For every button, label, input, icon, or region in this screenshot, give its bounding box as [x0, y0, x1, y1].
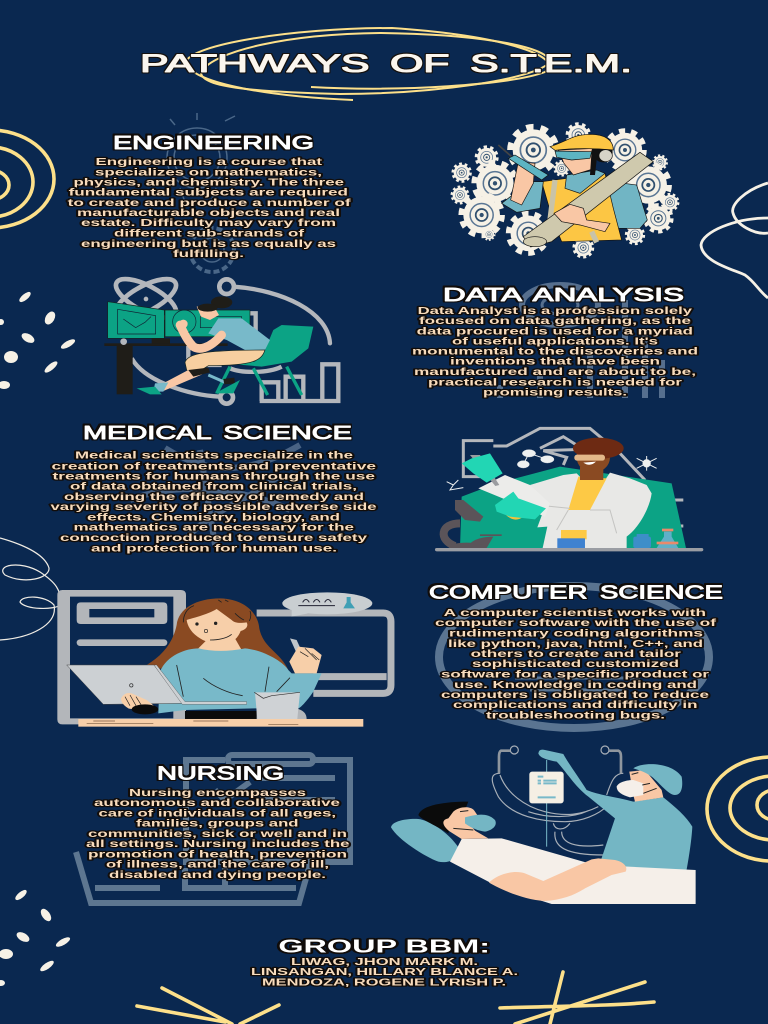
body: computer science: computer software with the use of	[435, 618, 717, 629]
engineer figure	[498, 134, 653, 247]
panel: medical science text	[50, 423, 378, 554]
body: data analysis: data procured is used for a myriad	[417, 326, 693, 338]
body: medical science: observing the efficacy of remedy and	[64, 492, 364, 503]
body: engineering: fulfilling.	[173, 249, 245, 260]
body: data analysis: promising results.	[483, 388, 628, 398]
decoration: white paint dabs lower	[0, 888, 71, 986]
body: engineering: engineering but is as equally as	[81, 239, 336, 250]
panel: computer science text	[429, 582, 723, 722]
illustration: woman with tablet	[57, 590, 391, 727]
panel: engineering text	[68, 133, 352, 260]
group members: LINSANGAN, HILLARY BLANCE A.	[251, 967, 519, 978]
scientist figure	[462, 438, 652, 548]
body: computer science: like python, java, html, C++, and	[448, 639, 703, 650]
illustration: scientist with pipette	[435, 428, 703, 551]
illustration: data analyst at desk	[104, 272, 338, 404]
group members	[251, 957, 519, 988]
body: engineering: specializes on mathematics,	[95, 168, 323, 178]
body: medical science: treatments for humans through the use	[52, 472, 376, 482]
heading: engineering: ENGINEERING	[113, 133, 314, 153]
decoration: right white scribble	[701, 183, 768, 298]
body: computer science: complications and difficulty in	[453, 700, 698, 711]
body: engineering: Engineering is a course that	[96, 157, 323, 168]
body: nursing: care of individuals of all ages,	[98, 808, 337, 820]
watermark: medical DNA	[130, 445, 300, 545]
decoration: lower-right yellow spirals	[707, 757, 768, 861]
illustration: nurse and patient	[391, 746, 696, 904]
grey document panel	[57, 590, 186, 724]
illustration: engineer with gears	[452, 124, 678, 257]
body: engineering: manufacturable objects and real	[77, 208, 340, 219]
body: computer science: others to create and tailor	[471, 649, 681, 660]
body: medical science: effects. Chemistry, biology, and	[87, 512, 340, 524]
body: computer science: computers is obligated to reduce	[441, 690, 710, 701]
body: data analysis: focused on data gathering, as the	[419, 316, 692, 327]
body: nursing: disabled and dying people.	[109, 870, 327, 881]
body: medical science: mathematics are necessary for the	[74, 522, 355, 534]
body: computer science: A computer scientist works with	[444, 608, 706, 619]
heading: group name: GROUP BBM:	[278, 936, 490, 956]
body: engineering: estate. Difficulty may vary from	[81, 218, 337, 229]
body: engineering: fundamental subjects are required	[69, 188, 348, 198]
body: nursing: of illness, and the care of ill,	[106, 860, 330, 870]
decoration: white paint dabs upper	[0, 290, 76, 389]
body: nursing: promotion of health, prevention	[88, 850, 347, 860]
body: computer science	[435, 608, 717, 722]
title text: PATHWAYS OF S.T.E.M.	[140, 50, 632, 78]
nurse figure	[538, 750, 692, 870]
decoration: bottom yellow star left	[137, 988, 279, 1024]
panel: nursing text	[86, 764, 351, 881]
body: engineering: physics, and chemistry. The three	[74, 178, 345, 188]
speech bubble	[282, 592, 372, 617]
chair	[217, 325, 313, 395]
watermark: engineering light bulb and gear	[167, 113, 235, 272]
watermark: computer science ring	[439, 586, 709, 728]
gears cluster	[452, 124, 678, 257]
green backdrop	[460, 467, 686, 548]
body: data analysis: manufactured and are about to be,	[414, 367, 697, 378]
heading: medical science: MEDICAL SCIENCE	[83, 423, 352, 443]
body: nursing: Nursing encompasses	[129, 788, 306, 799]
body: data analysis: Data Analyst is a profession solely	[418, 306, 693, 317]
body: computer science: rudimentary coding algorithms	[449, 628, 703, 640]
desk	[78, 719, 363, 727]
title with scribble ring	[140, 28, 632, 100]
decoration: left thin white scribble	[0, 538, 60, 640]
body: nursing: all settings. Nursing includes the	[86, 839, 351, 850]
microscope	[444, 500, 502, 551]
heading: data analysis: DATA ANALYSIS	[443, 285, 684, 305]
woman figure	[67, 598, 322, 719]
circuit lines	[463, 428, 683, 526]
body: medical science: concoction produced to ensure safety	[60, 533, 368, 544]
panel: data analysis text	[412, 285, 698, 398]
body: computer science: use. Knowledge in coding and	[454, 680, 697, 691]
body: nursing: communities, sick or well and in	[88, 829, 347, 840]
lab bottles	[633, 529, 678, 548]
body: nursing: autonomous and collaborative	[94, 798, 341, 809]
body: computer science: software for a specific product or	[441, 670, 709, 680]
body: medical science: of data obtained from clinical trials,	[70, 482, 358, 492]
group members: LIWAG, JHON MARK M.	[291, 957, 479, 968]
panel: group credits	[251, 936, 519, 988]
patient in bed	[391, 802, 696, 904]
body: data analysis	[412, 306, 698, 398]
stethoscope tubing	[492, 746, 623, 855]
body: medical science: Medical scientists specialize in the	[75, 450, 354, 462]
body: data analysis: of useful applications. It's	[452, 336, 658, 348]
IV drip	[529, 760, 564, 847]
heading: nursing: NURSING	[157, 764, 284, 784]
body: data analysis: monumental to the discoveries and	[412, 346, 698, 358]
body: medical science	[50, 450, 378, 554]
body: computer science: troubleshooting bugs.	[486, 710, 666, 722]
watermark: nursing clipboard	[76, 755, 350, 903]
body: engineering: to create and produce a number of	[68, 198, 352, 209]
body: medical science: and protection for human use.	[91, 544, 338, 554]
body: nursing: families, groups and	[136, 818, 299, 830]
atom icon	[111, 272, 181, 325]
lab bench line	[435, 548, 703, 551]
body: engineering: different sub-strands of	[114, 228, 305, 240]
group members: MENDOZA, ROGENE LYRISH P.	[262, 978, 507, 988]
molecule nodes	[447, 450, 657, 490]
scribble ring	[186, 28, 550, 100]
heading: computer science: COMPUTER SCIENCE	[429, 582, 723, 602]
decoration: bottom yellow star right	[500, 972, 654, 1024]
body: medical science: varying severity of possible adverse side	[50, 502, 378, 513]
monitors and desk	[104, 302, 250, 394]
body: engineering	[68, 157, 352, 260]
body: medical science: creation of treatments and preventative	[52, 462, 377, 472]
decoration: top-left yellow spirals	[0, 130, 54, 228]
body: data analysis: practical research is needed for	[428, 378, 682, 388]
orbit arc and bar chart	[132, 279, 338, 404]
body: data analysis: inventions that have been	[450, 356, 660, 368]
body: nursing	[86, 788, 351, 881]
seated person	[137, 296, 270, 394]
body: computer science: sophisticated customized	[472, 659, 679, 670]
watermark: data analysis	[500, 285, 662, 398]
grey monitor panel	[257, 613, 391, 693]
